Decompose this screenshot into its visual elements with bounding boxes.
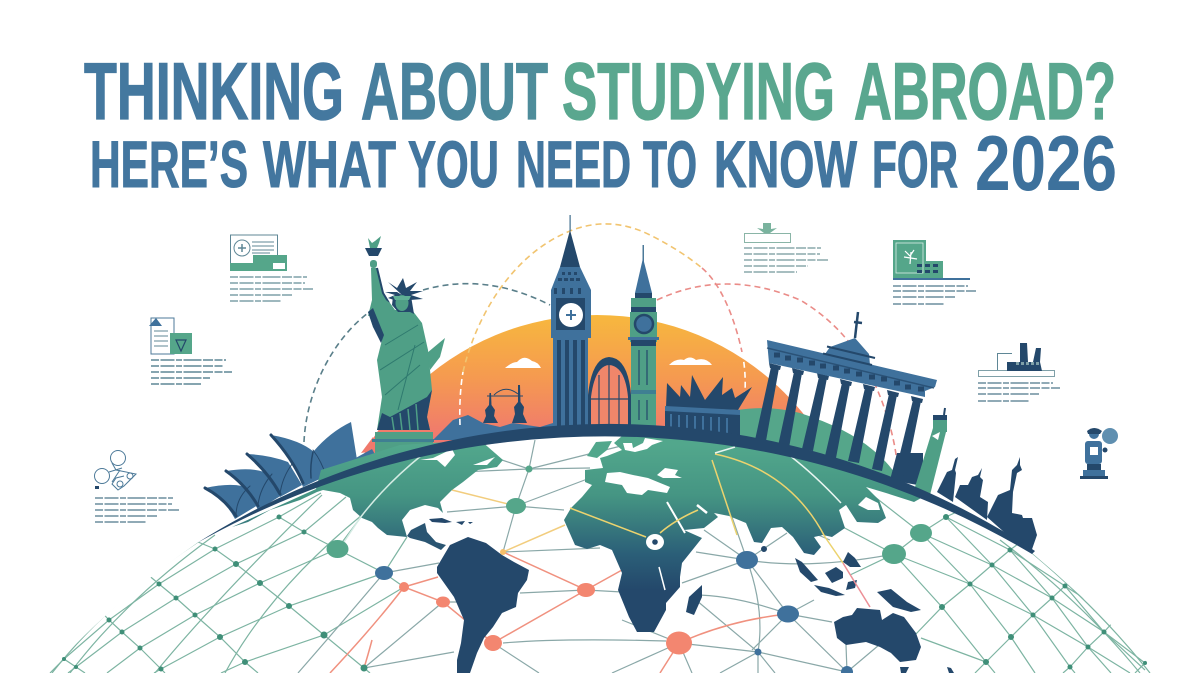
entablature bbox=[767, 340, 937, 397]
landmark: Sydney Opera House small bbox=[665, 375, 752, 438]
icon block: globe outline figure bbox=[94, 450, 179, 522]
title line 1 bbox=[84, 47, 1116, 137]
distant skyline: pagodas and hills bbox=[433, 385, 555, 440]
horizon band bbox=[197, 424, 1035, 554]
route lines on ocean: coral bbox=[330, 552, 788, 673]
Caribbean islands bbox=[429, 518, 473, 525]
clouds bbox=[505, 358, 712, 368]
Mediterranean and northern seas bbox=[605, 438, 880, 590]
title line 2: NEED bbox=[516, 127, 631, 201]
pedestal bbox=[375, 432, 433, 456]
landmark: green tower bbox=[915, 408, 947, 495]
title line 2 bbox=[90, 127, 958, 201]
tablet bbox=[427, 338, 445, 370]
network nodes bbox=[62, 466, 1147, 673]
landmark: arched window bbox=[588, 357, 631, 428]
landmark: Statue of Liberty bbox=[365, 236, 445, 456]
head bbox=[392, 296, 414, 314]
column capitals bbox=[769, 363, 923, 403]
title line 2: TO bbox=[643, 127, 697, 201]
icon: microscope figure bbox=[1080, 428, 1118, 479]
landmark: clock tower bbox=[628, 245, 659, 426]
title line 2: FOR bbox=[872, 127, 958, 201]
title line 1: STUDYING bbox=[562, 47, 835, 137]
globe disc bbox=[48, 436, 1157, 673]
grid mesh bbox=[50, 440, 1150, 673]
dashed arc: coral route bbox=[657, 284, 897, 463]
tower block bbox=[890, 453, 923, 486]
route lines on ocean: amber bbox=[452, 490, 565, 552]
robe bbox=[368, 298, 432, 430]
title line 2: WHAT bbox=[263, 127, 396, 201]
title line 1: ABOUT bbox=[361, 47, 548, 137]
British Isles and Nordic landmass bbox=[587, 441, 612, 458]
title line 1: THINKING bbox=[84, 47, 344, 137]
flight paths over land bbox=[342, 447, 870, 607]
columns bbox=[755, 367, 921, 476]
year 2026: 2026 bbox=[975, 119, 1117, 207]
dashed arc: orange route bbox=[460, 224, 745, 425]
caption lines bbox=[893, 286, 976, 304]
icon block: document with badge bbox=[149, 318, 232, 384]
icon block: passport card bbox=[230, 235, 313, 301]
ringed location marker bbox=[646, 534, 664, 550]
landmark: Big Ben bbox=[551, 215, 591, 427]
caption lines bbox=[151, 360, 232, 384]
caption lines bbox=[230, 277, 313, 301]
title line 2: KNOW bbox=[714, 127, 857, 201]
icon block: ship bbox=[978, 343, 1060, 401]
caption lines bbox=[744, 248, 828, 272]
Hudson bay and Labrador gaps bbox=[420, 449, 495, 467]
icon block: chalkboard bbox=[893, 240, 976, 304]
pediment and cross bbox=[825, 338, 870, 365]
globe bbox=[48, 424, 1157, 673]
dashed arc: navy route bbox=[304, 284, 550, 442]
raised arm bbox=[368, 268, 390, 316]
landmark: dark city skyline bbox=[937, 457, 1037, 555]
sun bbox=[332, 315, 862, 580]
landmark: Sydney Opera House large bbox=[205, 422, 378, 519]
Madagascar, Asia-Pacific islands and Australia bbox=[686, 546, 954, 673]
Central America bbox=[407, 523, 446, 550]
clock face bbox=[559, 303, 583, 327]
caption lines bbox=[978, 383, 1060, 401]
title line 2: YOU bbox=[408, 127, 499, 201]
crown rays bbox=[385, 278, 423, 300]
caption lines bbox=[95, 498, 179, 522]
South America bbox=[437, 537, 529, 673]
frieze blocks bbox=[774, 352, 924, 392]
landmark: Brandenburg Gate bbox=[755, 312, 937, 486]
torch bbox=[368, 236, 381, 248]
North America bbox=[232, 440, 503, 537]
title line 2: HERE’S bbox=[90, 127, 248, 201]
green hill bbox=[737, 408, 900, 480]
icon block: certificate bbox=[744, 223, 828, 272]
Eurasia and Africa bbox=[564, 436, 923, 632]
title bbox=[84, 47, 1117, 207]
